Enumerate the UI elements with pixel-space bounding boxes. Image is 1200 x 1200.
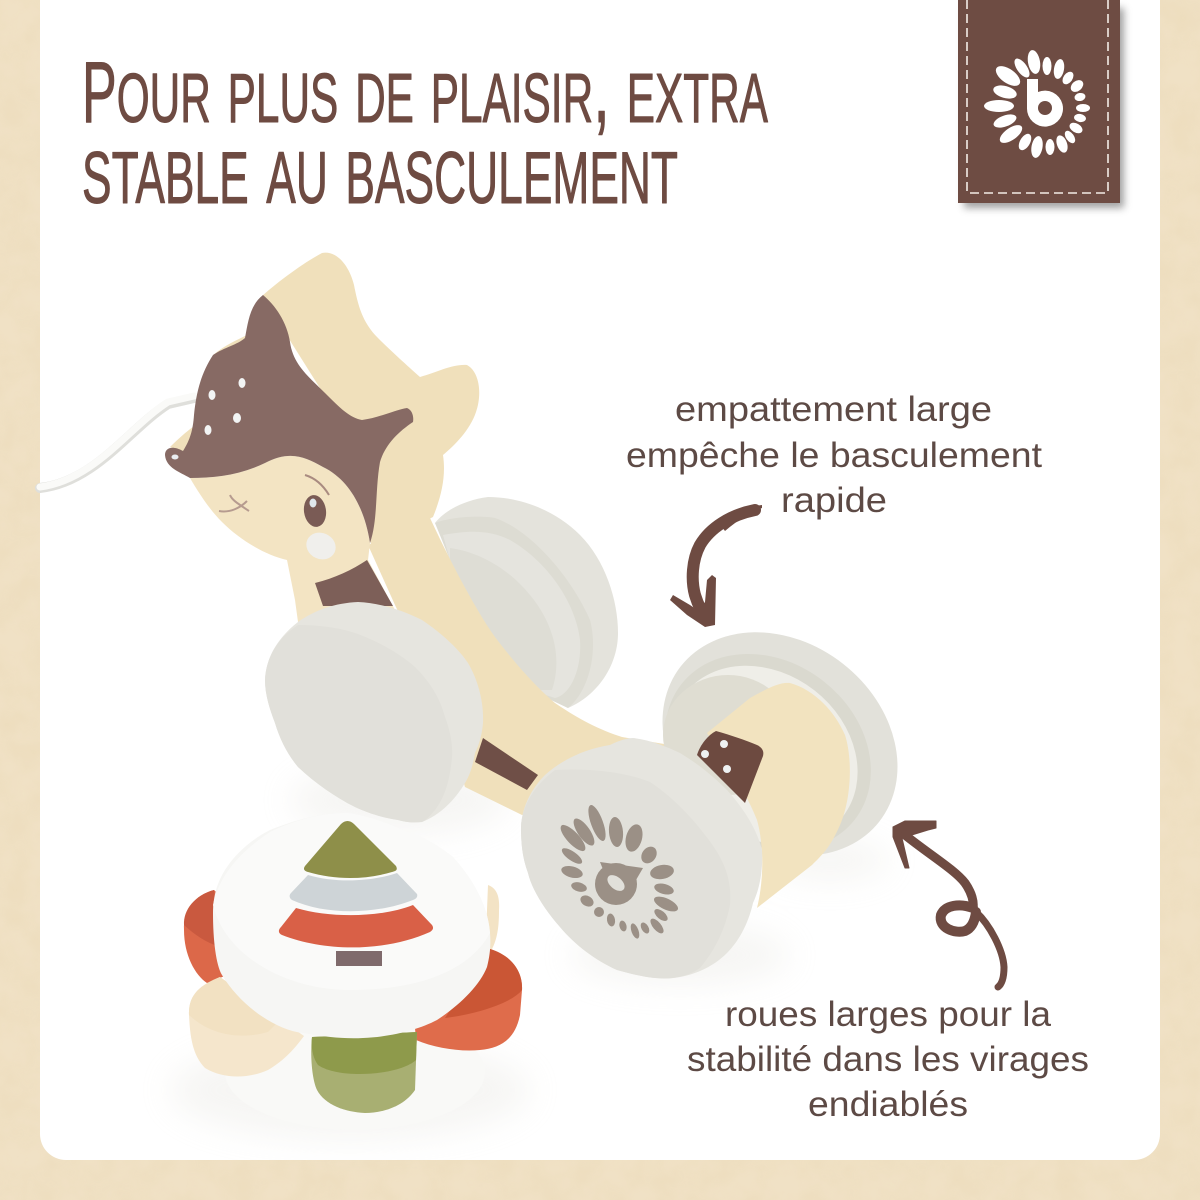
tail patch bbox=[697, 731, 763, 803]
callout: wide wheels: stabilité dans les virages bbox=[687, 1040, 1089, 1079]
callout: wheelbase: empattement large bbox=[675, 390, 992, 429]
arrow: bottom callout bbox=[893, 821, 1004, 987]
stacking toy bbox=[184, 813, 522, 1130]
far right wheel bbox=[618, 586, 942, 902]
wheel logo bbox=[557, 803, 680, 940]
arrow: top callout bbox=[670, 505, 762, 627]
head side thickness bbox=[262, 253, 479, 548]
head rim bbox=[170, 335, 250, 452]
title: stable au basculement bbox=[82, 110, 678, 226]
face details bbox=[172, 378, 340, 564]
brand tag with logo bbox=[958, 0, 1124, 208]
callout: wheelbase: empêche le basculement bbox=[626, 436, 1042, 475]
title bbox=[82, 32, 768, 226]
front right wheel bbox=[521, 738, 762, 978]
top disc bbox=[213, 813, 490, 1038]
base disc bbox=[225, 1014, 485, 1130]
ground shadows bbox=[170, 765, 890, 1140]
callout: wheelbase bbox=[626, 390, 1042, 520]
body stripe bbox=[475, 738, 538, 790]
pull string bbox=[40, 396, 194, 488]
petal: red right bbox=[415, 949, 522, 1051]
title: Pour plus de plaisir, extra bbox=[82, 32, 768, 144]
rear wheel behind body bbox=[435, 497, 618, 708]
petal: green front bbox=[311, 1032, 417, 1113]
body strip bbox=[368, 518, 700, 815]
front left wheel bbox=[265, 602, 483, 822]
callout: wide wheels: endiablés bbox=[808, 1085, 968, 1124]
tree print bbox=[279, 821, 433, 966]
callout: wheelbase: rapide bbox=[781, 481, 887, 520]
brown mask bbox=[165, 295, 413, 543]
pull toy: fawn on wheels bbox=[165, 253, 942, 978]
callout: wide wheels: roues larges pour la bbox=[725, 995, 1052, 1034]
head front bbox=[190, 456, 395, 622]
icon: sunflower b logo bbox=[984, 49, 1090, 159]
tail block bbox=[707, 683, 850, 908]
petal: red left bbox=[184, 890, 240, 983]
callout: wide wheels bbox=[687, 995, 1089, 1124]
neck patch bbox=[315, 560, 393, 606]
petal: cream back bbox=[485, 885, 499, 960]
petal: cream left bbox=[189, 977, 304, 1076]
